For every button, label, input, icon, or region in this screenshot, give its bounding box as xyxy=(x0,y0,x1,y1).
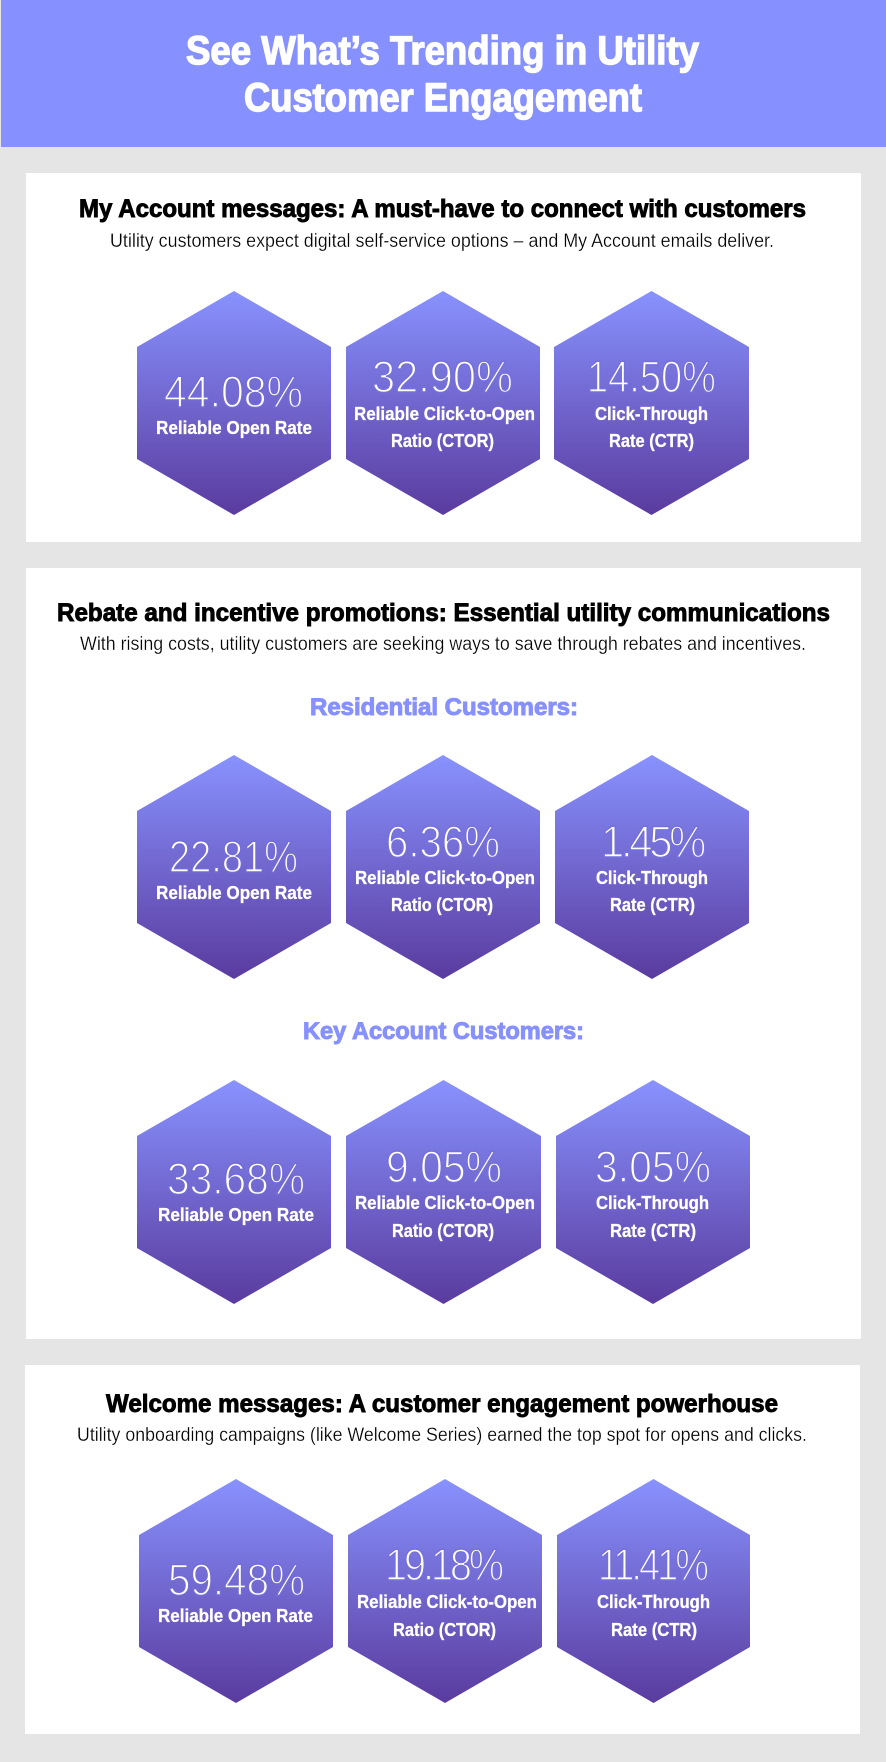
stat hexagon: residential reliable open rate 22.81%: Reliable Open Rate xyxy=(156,883,312,903)
subheading: My Account messages: Utility customers expect digital self-service options – and My Account emails deliver. xyxy=(110,230,774,252)
subheading: Welcome messages: Utility onboarding campaigns (like Welcome Series) earned the top spot for opens and clicks. xyxy=(77,1424,807,1446)
stat hexagon: click-through rate 14.50%: Click-Through xyxy=(595,404,708,424)
subheading: Rebate and incentive promotions: With rising costs, utility customers are seeking ways to save through rebates and incentives. xyxy=(80,633,806,655)
title: See What’s Trending in Utility xyxy=(186,29,700,73)
stat hexagon: residential reliable click-to-open ratio 6.36%: Reliable Click-to-Open xyxy=(355,868,535,888)
stat hexagon: key account click-through rate 3.05% xyxy=(556,1080,750,1304)
panel: My Account messages xyxy=(26,173,861,542)
stat hexagon: residential reliable open rate 22.81%: 22.81% xyxy=(169,833,298,882)
stat hexagon: key account reliable click-to-open ratio 9.05% xyxy=(346,1080,541,1304)
stat hexagon: reliable click-to-open ratio 32.90% xyxy=(346,291,540,515)
heading: Rebate and incentive promotions: Rebate and incentive promotions: Essential utility communications xyxy=(57,599,830,627)
segment heading: Residential Customers: Residential Customers: xyxy=(310,694,578,721)
stat hexagon: reliable click-to-open ratio 32.90%: 32.90% xyxy=(372,353,513,402)
stat hexagon: residential reliable open rate 22.81% xyxy=(137,755,331,979)
stat hexagon: residential click-through rate 1.45%: 1.45% xyxy=(601,818,705,867)
stat hexagon: residential click-through rate 1.45% xyxy=(555,755,749,979)
stat hexagon: welcome reliable open rate 59.48% xyxy=(139,1479,333,1703)
stat hexagon: reliable open rate 44.08%: Reliable Open Rate xyxy=(156,418,312,438)
panel: Welcome messages xyxy=(25,1365,860,1734)
stat hexagon: key account click-through rate 3.05%: Rate (CTR) xyxy=(610,1221,696,1241)
stat hexagon: key account reliable open rate 33.68%: Reliable Open Rate xyxy=(158,1205,314,1225)
stat hexagon: welcome reliable click-to-open ratio 19.18%: Ratio (CTOR) xyxy=(393,1620,496,1640)
stat hexagon: residential click-through rate 1.45%: Click-Through xyxy=(596,868,708,888)
stat hexagon: reliable click-to-open ratio 32.90%: Ratio (CTOR) xyxy=(391,431,494,451)
stat hexagon: welcome reliable open rate 59.48%: 59.48% xyxy=(168,1556,305,1605)
stat hexagon: key account reliable open rate 33.68% xyxy=(137,1080,331,1304)
stat hexagon: reliable click-to-open ratio 32.90%: Reliable Click-to-Open xyxy=(354,404,535,424)
stat hexagon: reliable open rate 44.08% xyxy=(137,291,331,515)
stat hexagon: key account click-through rate 3.05%: 3.05% xyxy=(595,1143,711,1192)
heading: My Account messages: My Account messages: A must-have to connect with customers xyxy=(79,195,806,223)
panel: Rebate and incentive promotions xyxy=(26,568,861,1339)
stat hexagon: key account reliable click-to-open ratio 9.05%: 9.05% xyxy=(386,1143,502,1192)
stat hexagon: key account click-through rate 3.05%: Click-Through xyxy=(596,1193,709,1213)
stat hexagon: residential reliable click-to-open ratio 6.36%: 6.36% xyxy=(386,818,500,867)
stat hexagon: welcome reliable open rate 59.48%: Reliable Open Rate xyxy=(158,1606,313,1626)
stat hexagon: reliable open rate 44.08%: 44.08% xyxy=(164,368,303,417)
stat hexagon: welcome click-through rate 11.41%: Click-Through xyxy=(597,1592,710,1612)
title xyxy=(186,29,700,120)
stat hexagon: welcome reliable click-to-open ratio 19.18%: 19.18% xyxy=(385,1541,503,1590)
segment heading: Key Account Customers: Key Account Customers: xyxy=(303,1018,584,1045)
stat hexagon: key account reliable click-to-open ratio 9.05%: Ratio (CTOR) xyxy=(392,1221,494,1241)
stat hexagon: welcome click-through rate 11.41%: 11.41% xyxy=(598,1541,708,1590)
stat hexagon: welcome click-through rate 11.41%: Rate (CTR) xyxy=(611,1620,697,1640)
header banner xyxy=(1,0,886,147)
heading: Welcome messages: Welcome messages: A customer engagement powerhouse xyxy=(106,1390,778,1418)
stat hexagon: welcome reliable click-to-open ratio 19.18%: Reliable Click-to-Open xyxy=(357,1592,537,1612)
stat hexagon: click-through rate 14.50%: Rate (CTR) xyxy=(609,431,694,451)
stat hexagon: welcome reliable click-to-open ratio 19.18% xyxy=(348,1479,542,1703)
stat hexagon: residential reliable click-to-open ratio 6.36%: Ratio (CTOR) xyxy=(391,895,493,915)
stat hexagon: residential reliable click-to-open ratio 6.36% xyxy=(346,755,540,979)
stat hexagon: welcome click-through rate 11.41% xyxy=(557,1479,750,1703)
stat hexagon: residential click-through rate 1.45%: Rate (CTR) xyxy=(610,895,695,915)
stat hexagon: key account reliable open rate 33.68%: 33.68% xyxy=(167,1155,305,1204)
stat hexagon: key account reliable click-to-open ratio 9.05%: Reliable Click-to-Open xyxy=(355,1193,535,1213)
stat hexagon: click-through rate 14.50% xyxy=(554,291,749,515)
stat hexagon: click-through rate 14.50%: 14.50% xyxy=(587,353,716,402)
title: Customer Engagement xyxy=(244,76,642,120)
